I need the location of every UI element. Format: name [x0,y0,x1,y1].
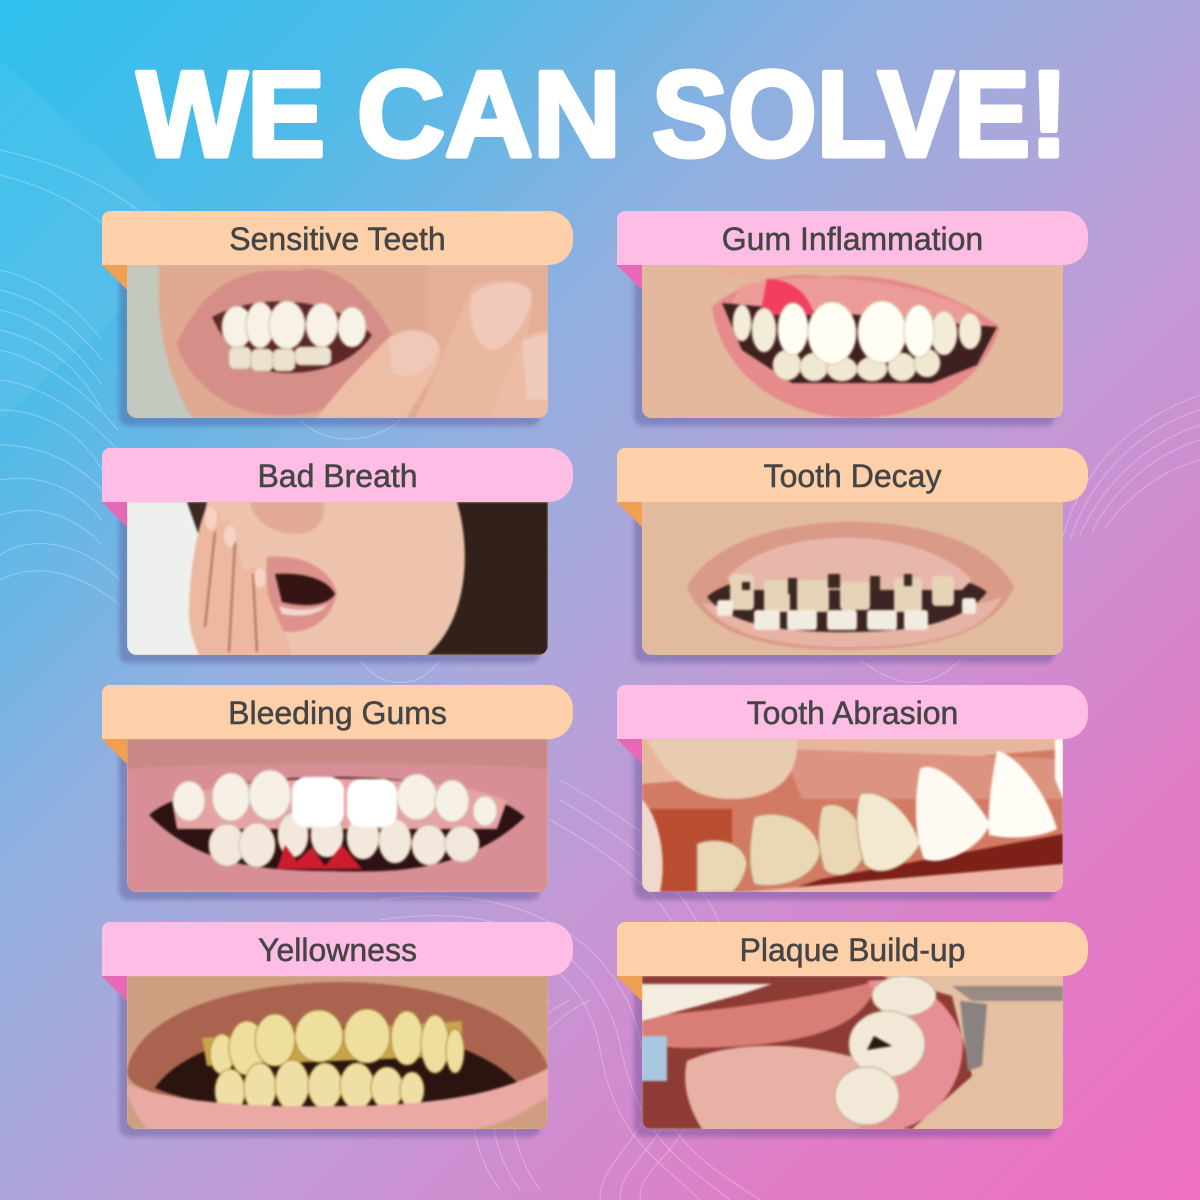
heading [617,211,1088,265]
heading: Bleeding Gums [228,695,447,731]
title [134,46,1068,182]
photo: yellowness [127,976,548,1129]
title: WE [137,46,325,182]
heading: Tooth Decay [764,458,941,494]
heading: Yellowness [258,932,417,968]
title: CAN [357,46,621,182]
panel: Plaque Build-up [617,922,1088,1139]
panel: Sensitive Teeth [102,211,573,428]
panel: Bleeding Gums [102,685,573,902]
heading [102,211,573,265]
panel: Gum Inflammation [617,211,1088,428]
panel: Tooth Abrasion [617,685,1088,902]
heading: Bad Breath [257,458,418,494]
heading [617,922,1088,976]
photo: plaque build-up [642,976,1063,1129]
panel: Yellowness [102,922,573,1139]
heading: Sensitive Teeth [229,221,446,257]
photo: tooth decay [642,502,1063,655]
photo: gum inflammation [642,265,1063,418]
panel: Tooth Decay [617,448,1088,665]
heading [617,448,1088,502]
heading: Plaque Build-up [740,932,965,968]
title: SOLVE! [652,46,1068,182]
heading [102,922,573,976]
heading [617,685,1088,739]
heading [102,448,573,502]
photo: tooth abrasion [642,739,1063,892]
heading [102,685,573,739]
photo: bad breath [127,502,548,655]
photo: sensitive teeth [127,265,548,418]
heading: Gum Inflammation [722,221,983,257]
panel: Bad Breath [102,448,573,665]
heading: Tooth Abrasion [747,695,958,731]
photo: bleeding gums [127,739,548,892]
